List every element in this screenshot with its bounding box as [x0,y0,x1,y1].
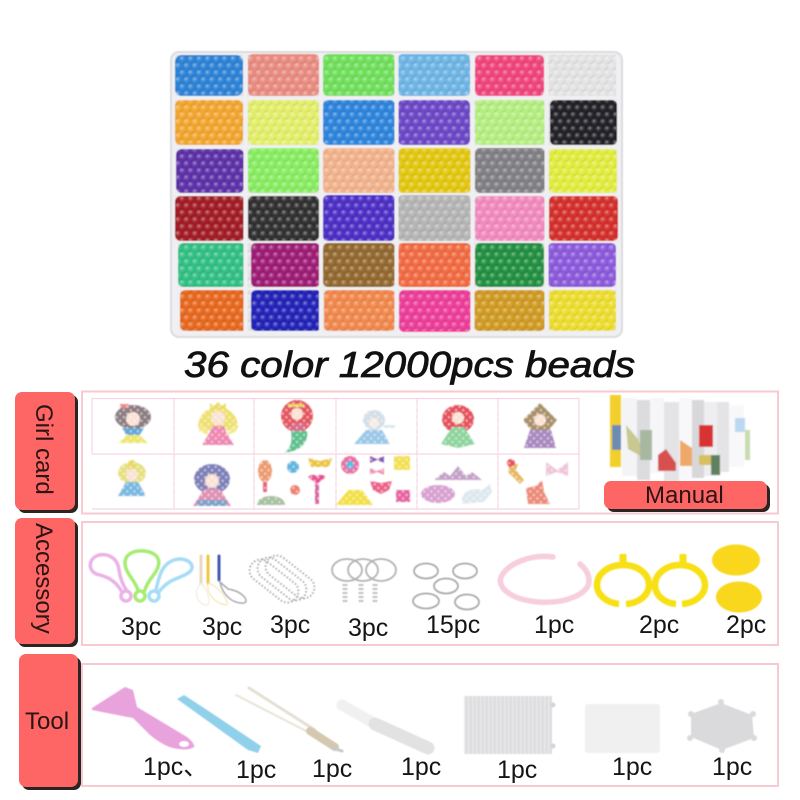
pattern: princess with blue hair [193,464,231,506]
quantity labels: accessory: 2pc [726,611,766,639]
section: girl card [15,392,778,514]
bead colour compartments [175,54,618,332]
icon: key rings [332,559,396,604]
icon: yellow rings [597,554,705,604]
panel: tool [82,664,778,786]
icon: small pegboard [585,704,660,753]
icon: yellow ovals [712,544,762,612]
quantity labels: tool: 1pc [712,753,752,781]
pattern card grid [92,398,579,509]
pattern: princess with purple dress [523,403,557,448]
pattern: ice princess [354,410,395,444]
label: girl card: Girl card [30,404,57,495]
icon: hexagon pegboard [687,699,757,753]
quantity labels: accessory [121,611,766,642]
quantity labels: tool: 1pc [312,755,352,783]
icon: plastic clasp loops [90,551,192,601]
label: girl card [15,392,78,513]
section: tool [19,654,778,790]
compartment dividers [246,55,546,331]
quantity labels: tool: 1pc、 [143,753,208,781]
pattern: accessories set one [257,458,332,505]
icon: large pegboard [464,696,556,754]
label: accessory: Accessory [30,523,57,634]
icon: ball chains [245,551,319,607]
quantity labels: accessory: 15pc [426,611,480,639]
icon: blue tool [177,695,261,753]
bead texture overlay [175,55,618,331]
icon: pink scraper [92,687,194,749]
pixel texture [100,400,570,508]
pattern: castle and carriage [421,466,492,504]
pattern: princess with dark hair [115,404,151,443]
quantity labels: tool [143,753,752,784]
pattern: princess in pink [198,402,238,445]
title: 36 color 12000pcs beads [184,344,635,385]
pattern: mermaid [281,400,313,453]
icon: tweezers [236,688,342,751]
pattern: rooster and bow [507,459,568,504]
icon: clear tool [342,705,428,748]
quantity labels: accessory: 3pc [348,614,388,642]
quantity labels: accessory: 2pc [639,611,679,639]
icon: phone straps [196,556,246,605]
quantity labels: accessory: 3pc [121,613,161,641]
pattern: accessories set two [336,456,410,505]
pattern: princess with green dress [441,405,475,448]
icon: split rings [413,564,479,610]
quantity labels: tool: 1pc [401,753,441,781]
pattern: princess in blue [118,460,146,496]
panel: girl card [82,392,778,514]
quantity labels: accessory: 3pc [270,611,310,639]
bead patterns [100,400,570,508]
quantity labels: tool: 1pc [497,756,537,784]
quantity labels: accessory: 3pc [202,613,242,641]
manual button: Manual [645,482,724,509]
quantity labels: accessory: 1pc [534,611,574,639]
quantity labels: tool: 1pc [612,753,652,781]
bead storage tray [171,52,622,337]
label: accessory [15,518,78,647]
quantity labels: tool: 1pc [236,756,276,784]
section: accessory [15,518,778,647]
manual rolls [610,395,750,482]
icon: pink bracelet [500,556,589,602]
manual button [604,481,770,512]
tray frame [171,52,622,337]
label: tool [19,654,81,790]
label: tool: Tool [25,708,69,735]
panel: accessory [82,522,778,645]
